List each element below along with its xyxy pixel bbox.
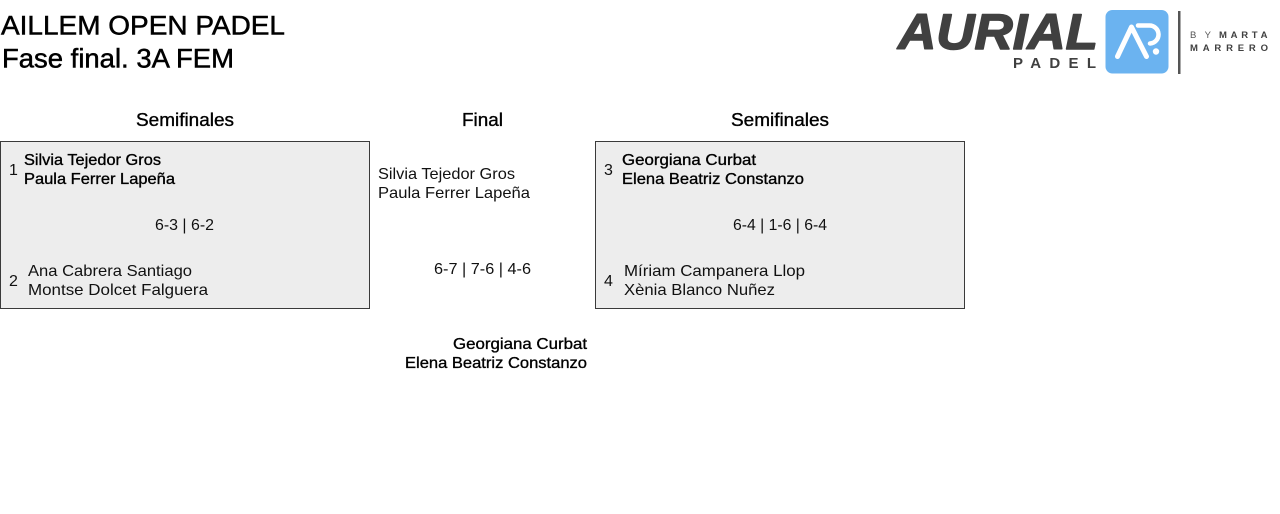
logo: Aurial Padel: BY	[1190, 30, 1212, 41]
panel: final	[378, 166, 588, 372]
panel: semifinal 1: Paula Ferrer Lapeña	[24, 171, 175, 188]
logo: Aurial Padel: MARTA	[1219, 30, 1268, 41]
panel: semifinal 2	[596, 142, 964, 308]
panel: semifinal 2: Míriam Campanera Llop	[624, 263, 805, 280]
title	[1, 10, 285, 74]
panel: semifinal 2: Xènia Blanco Nuñez	[624, 282, 775, 299]
logo: Aurial Padel	[896, 4, 1268, 74]
panel: semifinal 1: 1	[9, 162, 18, 179]
panel: final: Silvia Tejedor Gros	[378, 166, 515, 183]
panel: semifinal 2: Georgiana Curbat	[622, 152, 757, 169]
panel: final: 6-7 | 7-6 | 4-6	[434, 261, 531, 278]
panel: final: Georgiana Curbat	[453, 336, 588, 353]
panel: final: Elena Beatriz Constanzo	[405, 355, 587, 372]
panel: final: Paula Ferrer Lapeña	[378, 185, 530, 202]
panel: semifinal 2: 4	[604, 273, 613, 290]
heading: Semifinales right: Semifinales	[731, 110, 829, 130]
panel: semifinal 1: 6-3 | 6-2	[155, 217, 214, 234]
panel: semifinal 1: Ana Cabrera Santiago	[28, 263, 192, 280]
logo: Aurial Padel: AURIAL	[896, 4, 1098, 60]
panel: semifinal 1: Silvia Tejedor Gros	[24, 152, 161, 169]
panel: semifinal 2: 6-4 | 1-6 | 6-4	[733, 217, 827, 234]
heading: Semifinales left: Semifinales	[136, 110, 234, 130]
title: AILLEM OPEN PADEL	[1, 10, 285, 40]
heading: Final: Final	[462, 110, 503, 130]
title: Fase final. 3A FEM	[2, 44, 234, 74]
logo: Aurial Padel: MARRERO	[1190, 43, 1268, 54]
logo: Aurial Padel: PADEL	[1013, 55, 1096, 72]
panel: semifinal 1	[0, 142, 370, 308]
panel: semifinal 2: 3	[604, 162, 613, 179]
panel: semifinal 1: 2	[9, 273, 18, 290]
panel: semifinal 2: Elena Beatriz Constanzo	[622, 171, 804, 188]
panel: semifinal 1: Montse Dolcet Falguera	[28, 282, 208, 299]
icon: AP badge	[1106, 10, 1168, 74]
